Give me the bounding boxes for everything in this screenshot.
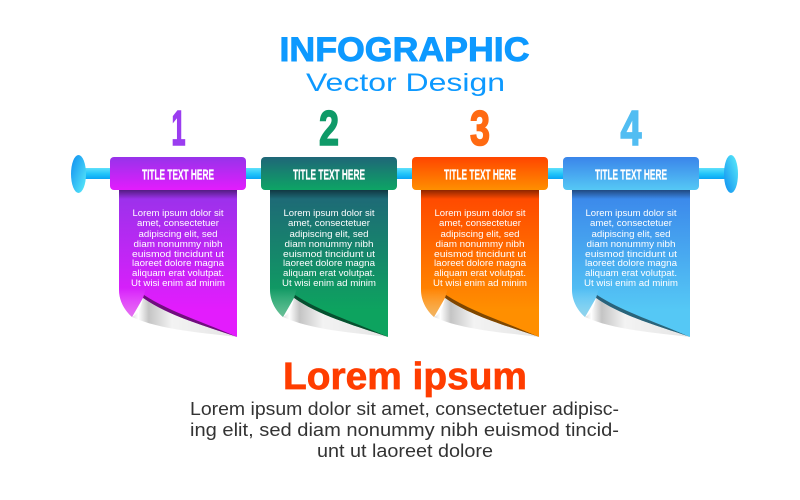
number 2: 2: [319, 102, 339, 156]
icon: right rod cap: [724, 155, 738, 193]
header bar: [563, 157, 699, 190]
icon: left rod cap: [71, 155, 86, 193]
body text: adipiscing elit, sed: [138, 229, 218, 239]
body text: amet, consectetuer: [137, 218, 219, 228]
page curl: [270, 288, 388, 337]
panel: step 4: [563, 102, 699, 337]
body text: Ut wisi enim ad minim: [584, 278, 678, 288]
body text: Lorem ipsum dolor sit: [284, 208, 375, 218]
body text: [131, 208, 225, 288]
body text: Lorem ipsum dolor sit: [586, 208, 677, 218]
ribbon body: [421, 190, 539, 337]
ribbon shadow: [572, 190, 690, 199]
body text: euismod tincidunt ut: [434, 249, 527, 259]
panel: step 1: [110, 102, 246, 337]
description text: ing elit, sed diam nonummy nibh euismod tincid-: [190, 420, 619, 440]
body text: Lorem ipsum dolor sit: [434, 208, 526, 218]
body text: aliquam erat volutpat.: [434, 268, 526, 278]
body text: laoreet dolore magna: [132, 258, 224, 268]
body text: aliquam erat volutpat.: [132, 268, 224, 278]
body text: Lorem ipsum dolor sit: [132, 208, 224, 218]
body text: laoreet dolore magna: [434, 258, 526, 268]
horizontal rod: [71, 155, 738, 193]
ribbon shadow: [119, 190, 237, 199]
body text: aliquam erat volutpat.: [283, 268, 375, 278]
title: INFOGRAPHIC: [280, 31, 530, 69]
page curl: [572, 288, 690, 337]
body text: diam nonummy nibh: [586, 239, 676, 249]
body text: amet, consectetuer: [288, 218, 370, 228]
panel: step 3: [412, 102, 548, 337]
header title: TITLE TEXT HERE: [444, 166, 516, 184]
page curl: [119, 288, 237, 337]
subtitle: Vector Design: [306, 69, 505, 97]
panel: step 2: [261, 102, 397, 337]
heading: Lorem ipsum: Lorem ipsum: [283, 356, 527, 398]
body text: euismod tincidunt ut: [132, 249, 225, 259]
number 3: 3: [470, 102, 490, 156]
header title: TITLE TEXT HERE: [595, 166, 667, 184]
ribbon body: [119, 190, 237, 337]
header bar: [261, 157, 397, 190]
header title: TITLE TEXT HERE: [293, 166, 365, 184]
header bar: [110, 157, 246, 190]
number 1: 1: [172, 102, 186, 156]
body text: aliquam erat volutpat.: [585, 268, 677, 278]
number 4: 4: [620, 102, 642, 156]
body text: adipiscing elit, sed: [440, 229, 520, 239]
body text: diam nonummy nibh: [134, 239, 222, 249]
page curl: [421, 288, 539, 337]
description text: unt ut laoreet dolore: [317, 441, 493, 461]
body text: adipiscing elit, sed: [290, 229, 368, 239]
ribbon body: [572, 190, 690, 337]
description text: Lorem ipsum dolor sit amet, consectetuer adipisc-: [190, 399, 619, 419]
body text: diam nonummy nibh: [284, 239, 374, 249]
ribbon shadow: [270, 190, 388, 199]
body text: Ut wisi enim ad minim: [131, 278, 225, 288]
body text: amet, consectetuer: [439, 218, 521, 228]
header title: TITLE TEXT HERE: [142, 166, 214, 184]
body text: laoreet dolore magna: [283, 258, 375, 268]
ribbon body: [270, 190, 388, 337]
body text: [584, 208, 678, 288]
body text: Ut wisi enim ad minim: [282, 278, 376, 288]
body text: euismod tincidunt ut: [283, 249, 376, 259]
body text: Ut wisi enim ad minim: [433, 278, 527, 288]
body text: laoreet dolore magna: [585, 258, 677, 268]
body text: amet, consectetuer: [590, 218, 672, 228]
body text: [282, 208, 376, 288]
ribbon shadow: [421, 190, 539, 199]
body text: euismod tincidunt ut: [585, 249, 678, 259]
body text: adipiscing elit, sed: [592, 229, 670, 239]
body text: [433, 208, 527, 288]
body text: diam nonummy nibh: [436, 239, 524, 249]
description text: [190, 399, 619, 461]
header bar: [412, 157, 548, 190]
